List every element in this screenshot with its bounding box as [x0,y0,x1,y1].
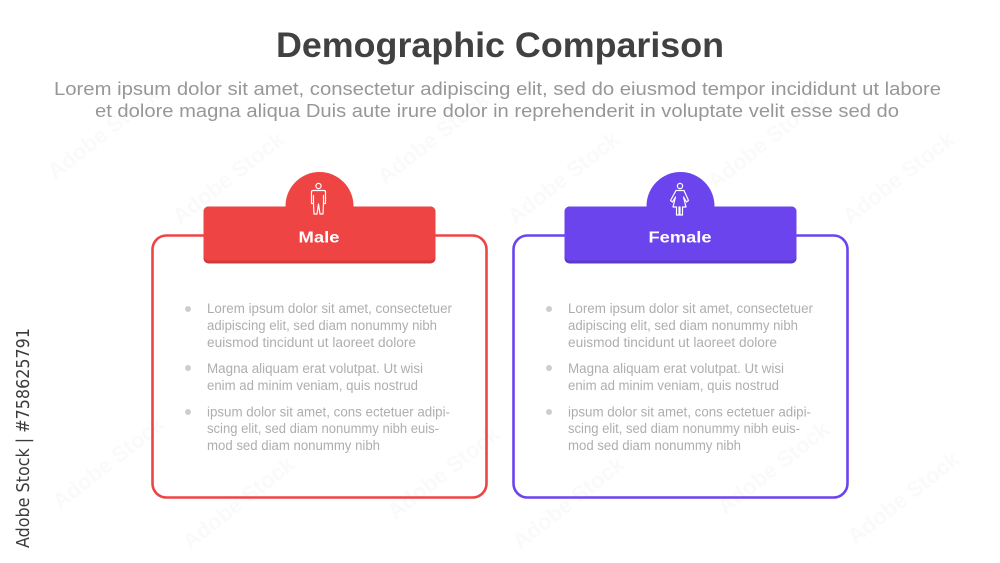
bullet list: male [185,301,453,453]
subtitle: et dolore magna aliqua Duis aute irure dolor in reprehenderit in voluptate velit esse sed do [95,100,899,121]
bullet list: female [546,301,814,453]
text: Adobe Stock [713,416,835,519]
bullet list: male: Lorem ipsum dolor sit amet, consectetuer [207,301,453,316]
text: Adobe Stock [843,446,965,549]
bullet list: female: mod sed diam nonummy nibh [568,438,741,453]
bullet list: female: Lorem ipsum dolor sit amet, consectetuer [568,301,814,316]
bullet list: female: adipiscing elit, sed diam nonummy nibh [568,318,798,333]
text: Adobe Stock [703,91,825,194]
header tab: male [204,172,436,264]
icon: male figure [312,183,326,214]
bullet list: male: scing elit, sed diam nonummy nibh euis- [207,421,439,436]
text: Adobe Stock [383,421,505,524]
bullet list: female: enim ad minim veniam, quis nostrud [568,378,779,393]
text: Adobe Stock [48,411,170,514]
label: Male: Male [298,230,340,246]
bullet list: female: scing elit, sed diam nonummy nibh euis- [568,421,800,436]
label: Female: Female [648,230,712,246]
panel: female [514,172,848,498]
bullet list: male: Magna aliquam erat volutpat. Ut wisi [207,361,423,376]
text: Adobe Stock [168,126,290,229]
subtitle [54,78,941,121]
bullet list: female: Magna aliquam erat volutpat. Ut wisi [568,361,784,376]
text: Adobe Stock [508,451,630,554]
title: Demographic Comparison [276,26,724,65]
header tab: female [564,172,796,264]
text: Adobe Stock [43,81,165,184]
text: Adobe Stock [503,126,625,229]
bullet list: male: enim ad minim veniam, quis nostrud [207,378,418,393]
bullet list: male: euismod tincidunt ut laoreet dolore [207,335,416,350]
bullet list: male: mod sed diam nonummy nibh [207,438,380,453]
bullet list: female: ipsum dolor sit amet, cons ectetuer adipi- [568,404,811,420]
text: Adobe Stock [838,126,960,229]
subtitle: Lorem ipsum dolor sit amet, consectetur adipiscing elit, sed do eiusmod tempor incididunt ut labore [54,78,941,99]
text: Adobe Stock [178,451,300,554]
icon: female figure [670,183,688,215]
card outline: female [514,236,848,498]
stock credit: Adobe Stock | #758625791 [13,328,34,548]
bullet list: female: euismod tincidunt ut laoreet dolore [568,335,777,350]
text: Adobe Stock [373,86,495,189]
panel: male [152,172,486,498]
bullet list: male: ipsum dolor sit amet, cons ectetuer adipi- [207,404,450,420]
bullet list: male: adipiscing elit, sed diam nonummy nibh [207,318,437,333]
card outline: male [152,236,486,498]
